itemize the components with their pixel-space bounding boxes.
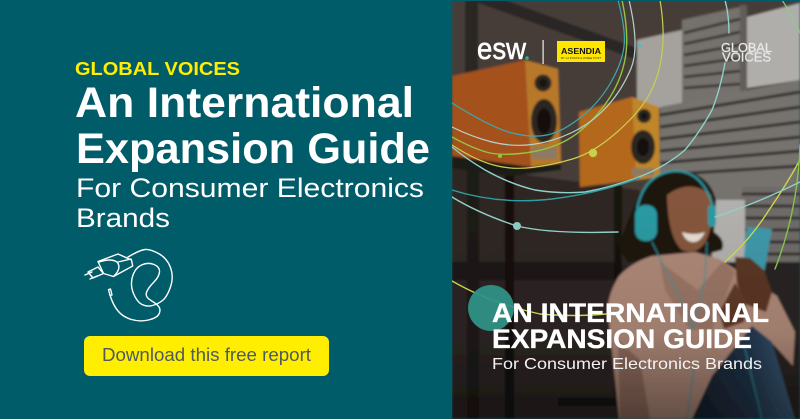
logo: Asendia: ASENDIA <box>561 46 601 56</box>
photo bottom shading <box>452 236 800 419</box>
wall: acoustic panel <box>637 3 800 265</box>
hoodie <box>608 252 795 419</box>
logo: Global Voices: GLOBAL <box>721 40 772 55</box>
panel: report cover <box>452 0 800 419</box>
cover photo: studio scene <box>452 0 800 419</box>
logo: esw: esw <box>477 31 527 66</box>
subtitle <box>76 173 424 233</box>
cover title: EXPANSION GUIDE <box>492 324 752 354</box>
logo: Asendia: BY LA POSTE & WISEE POST <box>561 56 601 60</box>
hands <box>735 257 772 312</box>
cover title <box>492 303 768 348</box>
lower dark studio <box>452 165 640 419</box>
logo: Asendia <box>557 41 605 62</box>
headphones <box>637 171 713 209</box>
logo: esw <box>478 42 529 60</box>
download button <box>84 336 329 376</box>
cover title: AN INTERNATIONAL <box>492 298 769 328</box>
icon: charger with cable <box>85 249 172 321</box>
line nodes <box>498 44 642 230</box>
logo divider <box>542 40 544 64</box>
left speaker <box>452 60 561 176</box>
left teal panel <box>0 0 452 419</box>
cover subtitle: For Consumer Electronics Brands <box>492 356 762 373</box>
logo: Global Voices: VOICES <box>722 50 771 64</box>
jeans <box>692 326 795 419</box>
headphone wires <box>652 242 762 419</box>
concentric lines <box>452 0 800 316</box>
teal circle <box>468 285 514 331</box>
download button: Download this free report <box>102 345 311 365</box>
main title <box>75 79 430 173</box>
wall: upper studio beams <box>464 1 636 74</box>
main title: An International <box>75 79 414 127</box>
subtitle: For Consumer Electronics <box>76 173 424 203</box>
face <box>667 186 712 252</box>
person <box>608 171 795 419</box>
phone <box>742 226 774 272</box>
main title: Expansion Guide <box>76 125 430 173</box>
subtitle: Brands <box>76 203 170 233</box>
eyebrow heading: GLOBAL VOICES <box>75 58 240 79</box>
logo: Global Voices <box>722 42 772 62</box>
hair <box>621 171 723 262</box>
right speaker <box>579 97 660 187</box>
